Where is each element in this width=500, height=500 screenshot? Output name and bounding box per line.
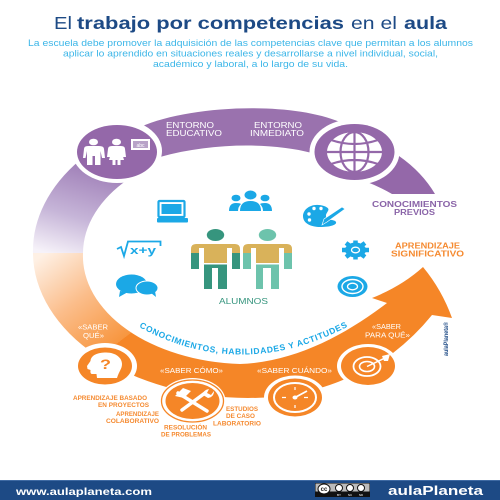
icon: clock xyxy=(264,376,326,420)
figure: left student xyxy=(191,229,240,289)
creative commons badge: NC xyxy=(348,493,353,497)
icon: square root formula: x+y xyxy=(130,245,157,257)
label: saber para qué: PARA QUÉ» xyxy=(365,330,410,340)
icon: head with question mark xyxy=(73,343,137,389)
intro text xyxy=(28,38,473,70)
orange text: estudios de caso xyxy=(226,406,259,420)
title xyxy=(54,13,447,33)
figure: right student xyxy=(243,229,292,289)
heading: aprendizaje significativo: SIGNIFICATIVO xyxy=(391,250,464,258)
orange text: aprendizaje colaborativo: APRENDIZAJE xyxy=(116,411,160,418)
label: saber qué xyxy=(78,322,109,340)
heading: entorno inmediato: ENTORNO xyxy=(254,121,302,130)
heading: aprendizaje significativo xyxy=(391,242,464,258)
orange text: estudios de caso: ESTUDIOS xyxy=(226,406,259,413)
intro text: aplicar lo aprendido en situaciones reales y desarrollarse a nivel individual, social, xyxy=(63,49,438,60)
creative commons badge: BY xyxy=(337,493,341,497)
alumnos figures xyxy=(191,229,292,306)
orange text: resolución de problemas: RESOLUCIÓN xyxy=(164,422,207,432)
heading: conocimientos previos: PREVIOS xyxy=(394,208,436,217)
creative commons badge xyxy=(315,483,370,497)
icon: archery target xyxy=(337,344,399,388)
heading: entorno inmediato xyxy=(250,121,304,138)
icon: square root formula xyxy=(117,242,160,257)
vertical brand mark: aulaPlaneta® xyxy=(443,321,450,356)
icon: teachers and board circle xyxy=(72,119,162,183)
heading: entorno educativo xyxy=(166,121,222,138)
orange text: aprendizaje basado en proyectos: APRENDIZAJE BASADO xyxy=(73,395,147,402)
heading: entorno educativo: ENTORNO xyxy=(166,121,214,130)
purple fading band left xyxy=(33,160,130,253)
icon: man xyxy=(83,139,105,165)
icon: hammer and wrench xyxy=(160,378,226,424)
title: trabajo por competencias xyxy=(77,13,344,33)
orange text: aprendizaje colaborativo: COLABORATIVO xyxy=(106,418,159,425)
icon: speech bubbles xyxy=(116,274,158,297)
orange text: aprendizaje colaborativo xyxy=(106,411,160,425)
footer bar xyxy=(0,480,500,500)
intro text: académico y laboral, a lo largo de su vida. xyxy=(153,59,348,70)
icon: palette and brush xyxy=(303,205,345,227)
icon: head with question mark: ? xyxy=(100,356,111,372)
label: alumnos: ALUMNOS xyxy=(219,296,268,306)
heading: conocimientos previos xyxy=(372,200,458,217)
orange text: aprendizaje basado en proyectos: EN PROYECTOS xyxy=(98,402,150,409)
title: aula xyxy=(404,13,447,33)
orange text: aprendizaje basado en proyectos xyxy=(73,395,150,409)
label: saber para qué: «SABER xyxy=(372,322,402,331)
icon: blue target xyxy=(338,276,368,297)
orange arrow band xyxy=(33,253,452,398)
label: saber para qué xyxy=(365,322,410,340)
purple band right: conocimientos previos xyxy=(367,156,435,194)
orange text: estudios de caso: DE CASO xyxy=(226,413,255,420)
footer logo: aulaPlaneta xyxy=(388,483,484,498)
footer url: www.aulaplaneta.com xyxy=(15,486,152,498)
curved text: conocimientos, habilidades y actitudes: CONOCIMIENTOS, HABILIDADES Y ACTITUDES xyxy=(140,322,347,354)
intro text: La escuela debe promover la adquisición de las competencias clave que permitan a los alumnos xyxy=(28,38,473,49)
icon: gear xyxy=(342,240,369,260)
icon: board: abc xyxy=(136,143,145,149)
label: saber cómo: «SABER CÓMO» xyxy=(160,366,223,375)
label: saber cuándo: «SABER CUÁNDO» xyxy=(257,366,332,375)
heading: entorno inmediato: INMEDIATO xyxy=(250,129,304,138)
title: en el xyxy=(351,13,397,33)
orange text: resolución de problemas: DE PROBLEMAS xyxy=(161,432,212,438)
orange text: resolución de problemas xyxy=(161,422,212,438)
icon: laptop xyxy=(157,201,188,222)
label: saber qué: «SABER xyxy=(78,322,109,332)
purple band top xyxy=(140,108,340,157)
icon: globe circle xyxy=(310,119,400,185)
creative commons badge: cc xyxy=(321,487,328,493)
heading: aprendizaje significativo: APRENDIZAJE xyxy=(395,242,461,250)
title: El xyxy=(54,13,72,33)
heading: entorno educativo: EDUCATIVO xyxy=(166,129,222,138)
icon: group of people xyxy=(229,190,272,211)
heading: conocimientos previos: CONOCIMIENTOS xyxy=(372,200,458,209)
orange text: laboratorio: LABORATORIO xyxy=(213,420,261,428)
icon: woman xyxy=(107,139,126,165)
label: saber qué: QUÉ» xyxy=(83,331,104,340)
creative commons badge: ND xyxy=(359,493,364,497)
